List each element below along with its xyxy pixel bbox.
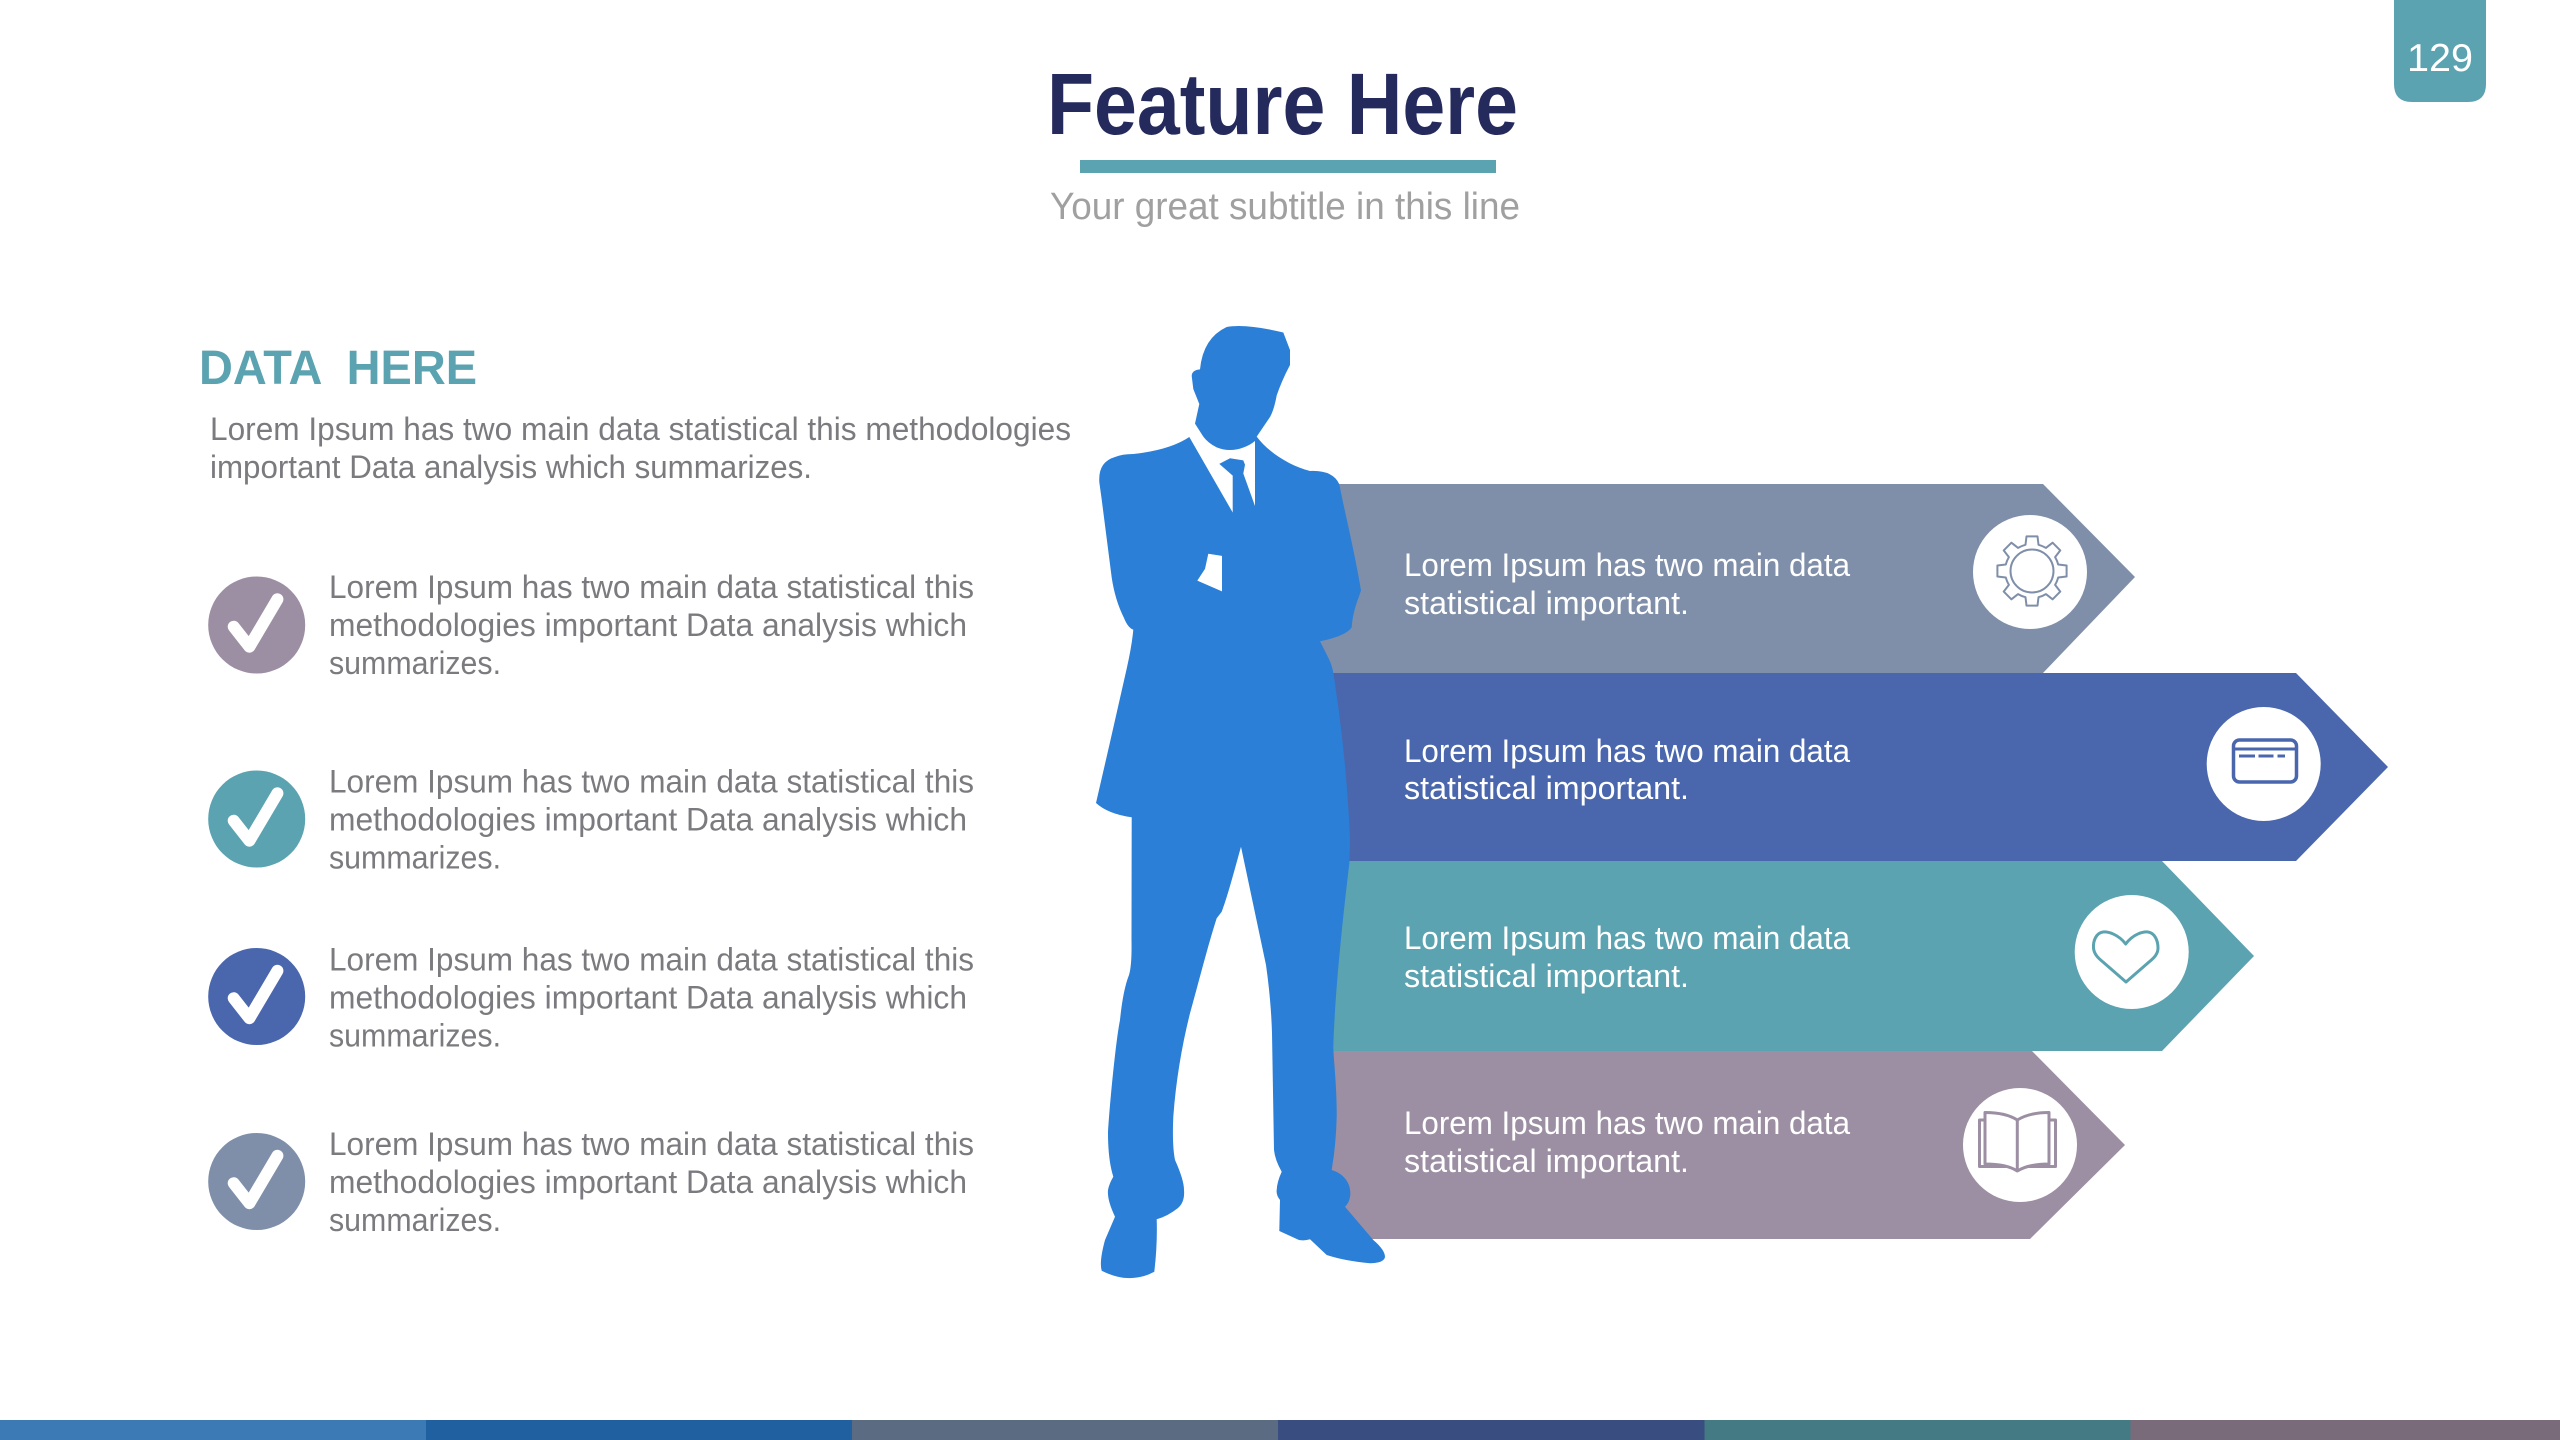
arrow 4 text: Lorem Ipsum has two main data bbox=[1404, 1105, 1850, 1141]
subtitle: Your great subtitle in this line bbox=[1050, 186, 1520, 228]
list item 3 bbox=[208, 942, 974, 1054]
arrow 4: purple bbox=[1310, 1051, 2125, 1239]
text: item 1: summarizes. bbox=[329, 645, 501, 681]
list item 2 bbox=[208, 764, 974, 876]
intro text: Lorem Ipsum has two main data statistical this methodologies bbox=[210, 411, 1071, 447]
text: item 2: summarizes. bbox=[329, 840, 501, 876]
arrow 1 text bbox=[1404, 547, 1850, 621]
text: item 1 bbox=[329, 569, 974, 681]
text: item 4: summarizes. bbox=[329, 1202, 501, 1238]
arrow 3: teal bbox=[1310, 861, 2254, 1051]
text: item 3: Lorem Ipsum has two main data statistical this bbox=[329, 942, 974, 978]
text: item 2: methodologies important Data analysis which bbox=[329, 802, 967, 838]
text: item 4: methodologies important Data analysis which bbox=[329, 1164, 967, 1200]
arrow 2 text bbox=[1404, 733, 1850, 806]
title: Feature Here bbox=[1047, 56, 1518, 153]
icon: check purple bbox=[208, 576, 305, 674]
text: item 4 bbox=[329, 1126, 974, 1238]
icon: check slate bbox=[208, 1133, 305, 1230]
arrow 1 text: Lorem Ipsum has two main data bbox=[1404, 547, 1850, 583]
arrow 3 text: Lorem Ipsum has two main data bbox=[1404, 920, 1850, 956]
icon: heart bbox=[2075, 895, 2189, 1009]
page number tab bbox=[2394, 0, 2486, 102]
text: item 2: Lorem Ipsum has two main data statistical this bbox=[329, 764, 974, 800]
icon: check teal bbox=[208, 770, 305, 868]
intro text bbox=[210, 411, 1071, 485]
text: item 3 bbox=[329, 942, 974, 1054]
section heading: DATA HERE bbox=[199, 342, 477, 395]
icon: gear bbox=[1973, 515, 2087, 629]
list item 4 bbox=[208, 1126, 974, 1238]
intro text: important Data analysis which summarizes. bbox=[210, 449, 812, 485]
arrow 1 text: statistical important. bbox=[1404, 585, 1689, 621]
arrow 3 text: statistical important. bbox=[1404, 958, 1689, 994]
page number tab: 129 bbox=[2407, 37, 2473, 80]
title underline bbox=[1080, 160, 1496, 173]
text: item 3: summarizes. bbox=[329, 1018, 501, 1054]
icon: check blue bbox=[208, 948, 305, 1045]
text: item 4: Lorem Ipsum has two main data statistical this bbox=[329, 1126, 974, 1162]
text: item 1: methodologies important Data analysis which bbox=[329, 607, 967, 643]
arrow 4 text: statistical important. bbox=[1404, 1143, 1689, 1179]
list item 1 bbox=[208, 569, 974, 681]
arrow 1: slate bbox=[1310, 484, 2135, 673]
footer colour bar bbox=[0, 1420, 2560, 1440]
arrow 2: blue bbox=[1310, 673, 2388, 861]
arrow 2 text: Lorem Ipsum has two main data bbox=[1404, 733, 1850, 769]
text: item 2 bbox=[329, 764, 974, 876]
arrow 2 text: statistical important. bbox=[1404, 770, 1689, 806]
text: item 3: methodologies important Data analysis which bbox=[329, 980, 967, 1016]
arrow 3 text bbox=[1404, 920, 1850, 994]
icon: credit card bbox=[2207, 707, 2321, 821]
text: item 1: Lorem Ipsum has two main data statistical this bbox=[329, 569, 974, 605]
icon: open book bbox=[1963, 1088, 2077, 1202]
arrow 4 text bbox=[1404, 1105, 1850, 1179]
businessman silhouette bbox=[1096, 326, 1385, 1278]
